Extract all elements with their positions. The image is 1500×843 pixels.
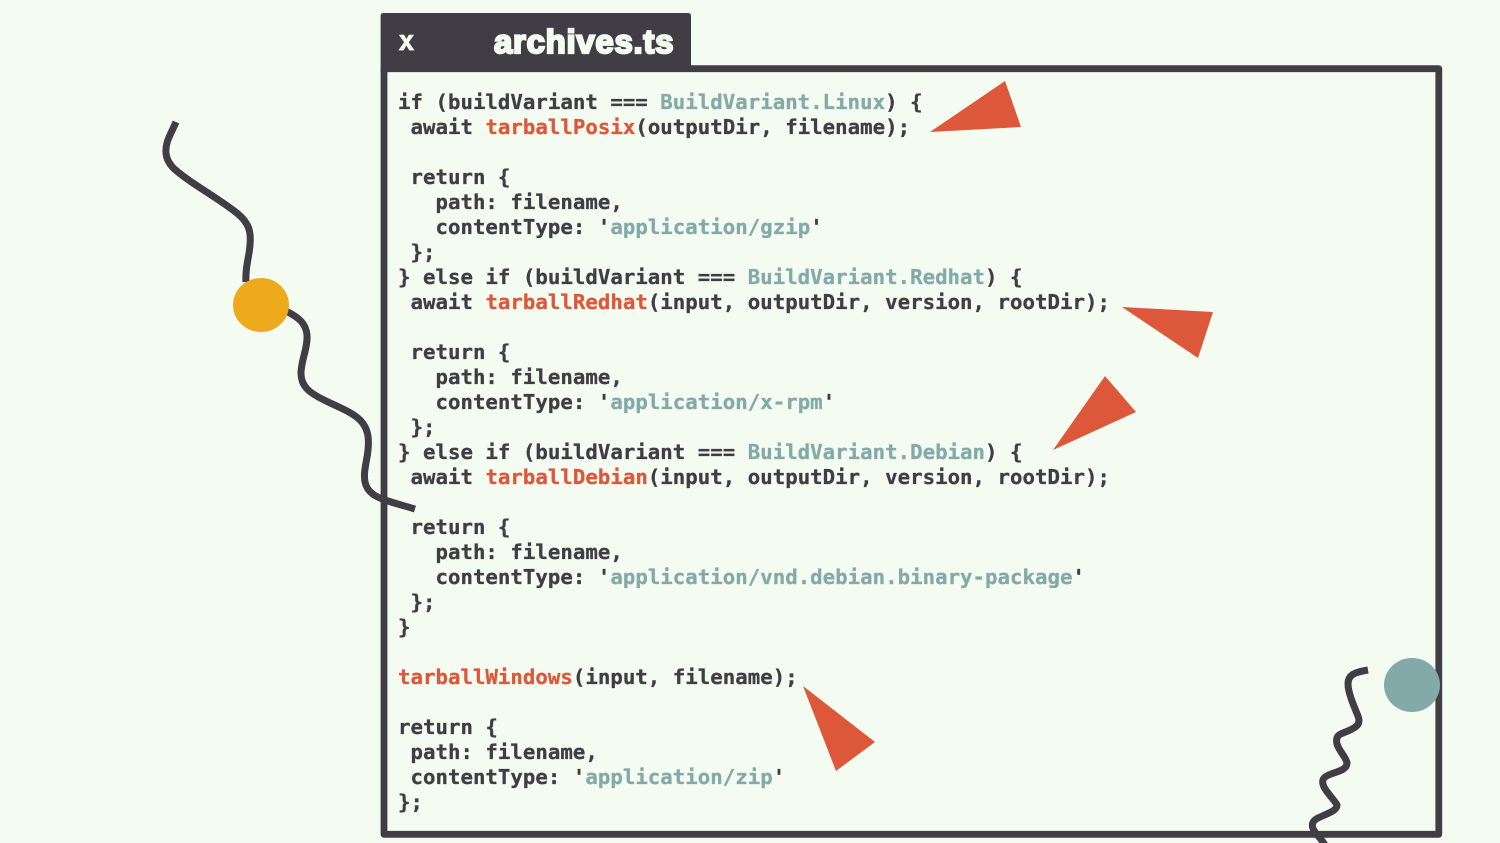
squiggle: lower right xyxy=(1312,670,1368,843)
circle: teal xyxy=(1384,658,1440,712)
arrow: tarballPosix xyxy=(930,81,1021,132)
circle: yellow xyxy=(233,278,289,332)
tab file name: archives.ts xyxy=(494,23,674,60)
arrow: tarballRedhat xyxy=(1122,307,1213,358)
tab close label: x xyxy=(398,24,415,57)
squiggle: upper left xyxy=(166,122,250,282)
arrow: tarballWindows xyxy=(803,686,875,771)
squiggle: lower left xyxy=(286,311,415,509)
arrow: tarballDebian xyxy=(1053,376,1136,450)
code listing: if (buildVariant === BuildVariant.Linux) { await tarballPosix(outputDir, filename); return { path: filename, contentType: 'application/gzip' }; } else if (buildVariant === BuildVariant.Redhat) { await tarballRedhat(input, outputDir, version, rootDir); return { path: filename, contentType: 'application/x-rpm' }; } else if (buildVariant === BuildVariant.Debian) { await tarballDebian(input, outputDir, version, rootDir); return { path: filename, contentType: 'application/vnd.debian.binary-package' }; } tarballWindows(input, filename); return { path: filename, contentType: 'application/zip' }; xyxy=(398,90,1110,814)
